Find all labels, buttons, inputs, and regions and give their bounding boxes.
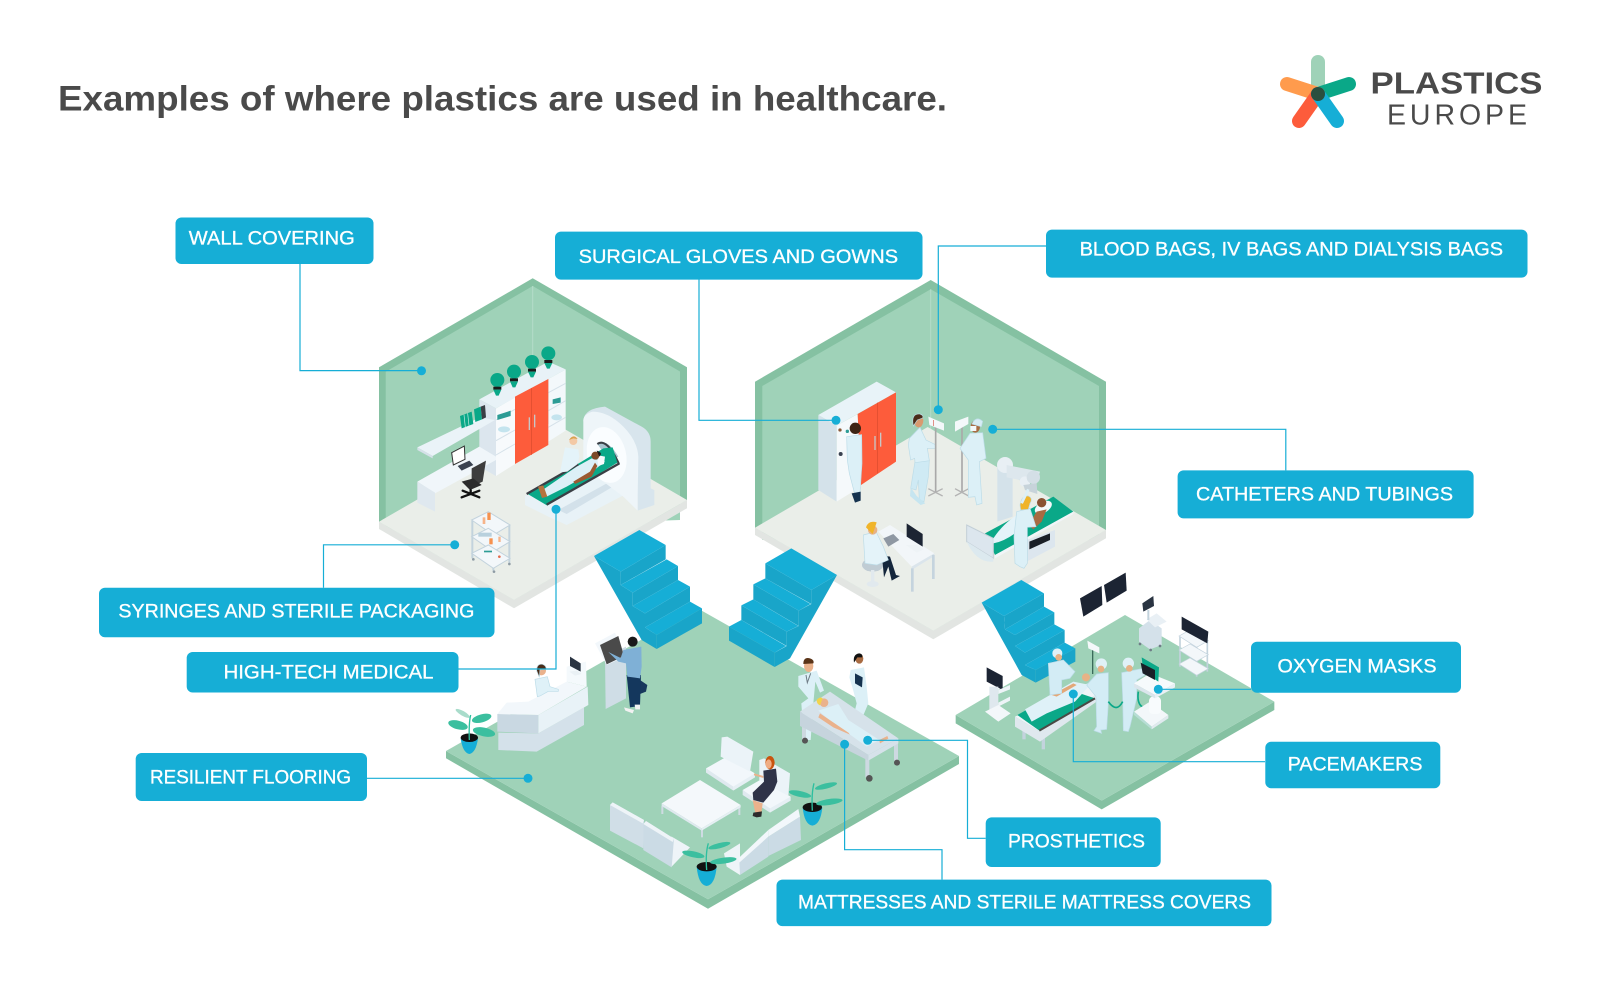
stretcher with patient [800, 692, 900, 782]
receptionist [535, 664, 558, 697]
logo wordmark [1370, 66, 1542, 132]
medical scanner [525, 407, 654, 525]
anaesthesia machine [1108, 657, 1175, 729]
panel: operating room equipment [985, 573, 1208, 749]
doctor with stethoscope [798, 658, 824, 740]
armchair upper [706, 737, 755, 791]
label: oxygen masks: OXYGEN MASKS [1278, 656, 1436, 677]
leader: oxygen masks [1158, 688, 1251, 690]
label: wall covering [176, 218, 374, 264]
patient [817, 697, 888, 747]
coffee table [662, 780, 741, 837]
logo star icon [1287, 62, 1349, 121]
treatment bed [967, 497, 1073, 562]
desk with laptop [417, 446, 496, 512]
office chair [462, 461, 486, 497]
label: prosthetics: PROSTHETICS [1008, 832, 1145, 852]
operating room floor [956, 615, 1274, 809]
panel: lounge and stretcher [610, 653, 900, 886]
IV pole left [928, 417, 944, 496]
nurse with chart [849, 653, 868, 722]
check-in kiosk [595, 633, 626, 709]
callout dots [417, 366, 1163, 783]
leader: syringes [324, 545, 455, 588]
label: surgical gloves and gowns: SURGICAL GLOVES AND GOWNS [579, 247, 898, 268]
label: syringes and sterile packaging: SYRINGES AND STERILE PACKAGING [118, 601, 474, 622]
staircase left [594, 530, 702, 649]
wall shelf with binders [417, 405, 495, 458]
main lobby floor [446, 608, 959, 909]
label: mattresses and sterile mattress covers [776, 880, 1272, 926]
white and orange cabinet [818, 382, 896, 503]
masked nurse [960, 419, 986, 505]
leader lines and dots [300, 246, 1286, 880]
staircase middle [729, 548, 837, 667]
label: resilient flooring: RESILIENT FLOORING [150, 768, 351, 788]
label: blood bags [1046, 230, 1528, 278]
reception desk [497, 657, 588, 752]
furniture and people [417, 346, 654, 573]
staircase right [982, 580, 1075, 683]
label: wall covering: WALL COVERING [189, 228, 355, 250]
blonde nurse at bed [1014, 489, 1036, 568]
rear equipment cart [1139, 596, 1167, 651]
scanner bed [526, 447, 619, 506]
panel: imaging room [379, 278, 687, 608]
left sofa [610, 802, 690, 867]
label: prosthetics [986, 817, 1161, 867]
visitor with bag [608, 637, 647, 713]
logo wordmark: EUROPE [1387, 100, 1527, 132]
nurse at cabinet [847, 423, 862, 503]
label: pacemakers [1265, 742, 1440, 788]
plant [447, 707, 496, 754]
wall monitors [1080, 573, 1127, 617]
leader: catheters [993, 429, 1286, 470]
label: resilient flooring [136, 753, 367, 801]
room floor [379, 422, 687, 608]
panel: treatment room [755, 280, 1106, 639]
room floor [755, 427, 1106, 639]
IV pole right [955, 417, 969, 496]
surgeon at monitor [1122, 658, 1145, 732]
label: high-tech medical [187, 652, 458, 692]
computer desk with seated doctor [862, 522, 934, 592]
leader: prosthetics [868, 740, 986, 838]
green bulbs [490, 346, 555, 396]
leader: surgical gloves [699, 279, 836, 420]
label: mattresses and sterile mattress covers: MATTRESSES AND STERILE MATTRESS COVERS [798, 893, 1251, 914]
label: syringes and sterile packaging [99, 588, 494, 637]
surgeon left [1048, 648, 1075, 695]
operating bed [1015, 673, 1108, 749]
left monitor stand [985, 667, 1011, 722]
label: surgical gloves and gowns [555, 232, 922, 280]
room walls [379, 278, 687, 600]
title: Examples of where plastics are used in healthcare. [58, 80, 947, 118]
label: oxygen masks [1251, 642, 1461, 693]
label: catheters and tubings [1178, 470, 1474, 518]
shelving cabinet with orange doors [479, 362, 566, 476]
label: high-tech medical: HIGH-TECH MEDICAL [224, 662, 434, 683]
label: pacemakers: PACEMAKERS [1288, 754, 1422, 775]
leader: high-tech medical [458, 509, 556, 669]
leader: wall covering [300, 263, 422, 371]
label: catheters and tubings: CATHETERS AND TUBINGS [1196, 485, 1453, 506]
room walls [755, 280, 1106, 631]
armchair with seated woman [743, 756, 791, 817]
panel: reception area [447, 633, 647, 754]
surgeon middle [1087, 658, 1108, 733]
leader: resilient flooring [366, 777, 528, 779]
logo: Plastics Europe [1287, 62, 1542, 132]
plant front [682, 840, 737, 886]
desk monitor [569, 657, 582, 676]
seated woman [753, 756, 777, 817]
monitor trolley [1179, 617, 1208, 677]
surgical lamp arm [997, 457, 1040, 522]
logo wordmark: PLASTICS [1370, 66, 1542, 100]
nurse at scanner [560, 436, 579, 472]
leader: mattresses [845, 744, 942, 880]
supply cart [472, 512, 511, 573]
IV pole [1087, 641, 1099, 674]
label: blood bags: BLOOD BAGS, IV BAGS AND DIALYSIS BAGS [1080, 240, 1503, 261]
patient on scanner [538, 451, 605, 498]
leader: pacemakers [1073, 694, 1265, 762]
leader: blood bags [938, 246, 1046, 410]
plant right [788, 781, 843, 826]
standing doctor [908, 414, 936, 505]
right sofa [724, 809, 801, 875]
